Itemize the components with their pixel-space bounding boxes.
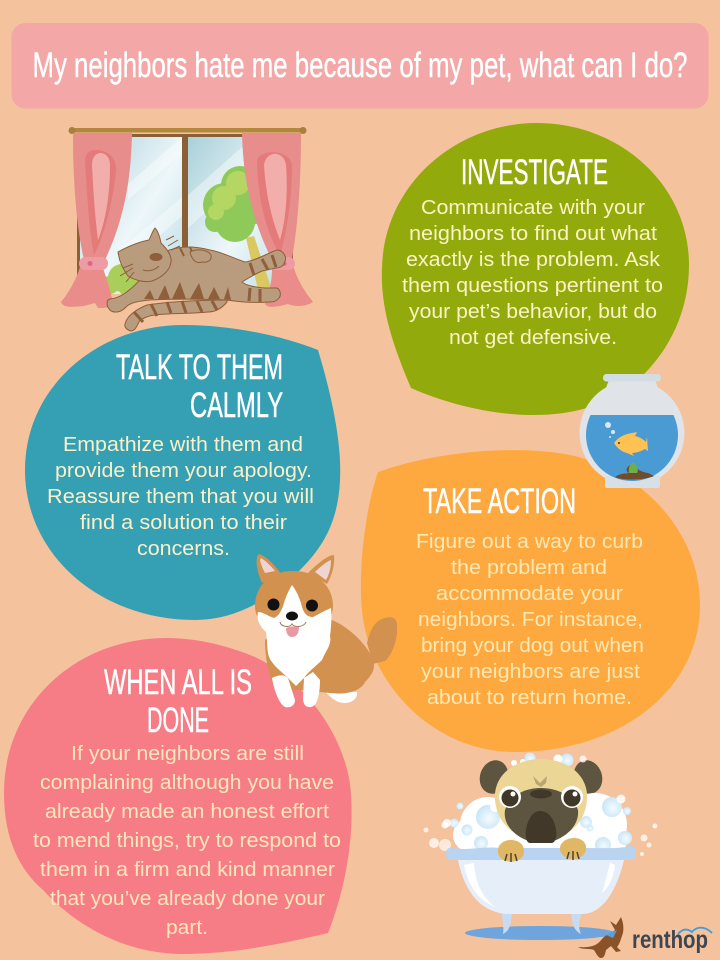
- left curtain: [61, 133, 132, 308]
- take action body: neighbors. For instance,: [418, 609, 643, 631]
- when all is done body: [33, 743, 341, 939]
- icon: goldfish bowl: [580, 374, 684, 488]
- tail: [125, 300, 227, 331]
- head: [118, 228, 171, 282]
- take action heading: TAKE ACTION: [423, 482, 576, 521]
- paws: [498, 838, 586, 862]
- take action body: bring your dog out when: [421, 635, 644, 657]
- ears: [257, 554, 281, 583]
- arm: [190, 250, 211, 263]
- investigate body: them questions pertinent to: [402, 275, 663, 297]
- tail: [367, 617, 397, 664]
- muzzle: [505, 788, 578, 843]
- investigate heading: INVESTIGATE: [461, 153, 608, 192]
- when all is done body: If your neighbors are still: [71, 743, 304, 765]
- investigate body: neighbors to find out what: [409, 223, 657, 245]
- take action body: [416, 531, 644, 709]
- take action body: about to return home.: [427, 687, 632, 709]
- tub rim: [446, 846, 636, 860]
- wordmark arc: [678, 928, 712, 934]
- eyes and nose: [268, 598, 280, 610]
- take action body: accommodate your: [436, 583, 623, 605]
- talk body: [47, 434, 314, 560]
- mouth and tongue: [280, 622, 306, 626]
- talk body: concerns.: [137, 538, 230, 560]
- head: [255, 571, 333, 628]
- panel: talk to them calmly: [25, 325, 340, 620]
- green blob: [382, 123, 689, 415]
- title banner: [12, 23, 708, 108]
- talk heading: CALMLY: [190, 386, 283, 425]
- icon: window with cat: [61, 127, 313, 331]
- ears: [475, 757, 513, 797]
- fish: [614, 432, 648, 456]
- body: [265, 618, 374, 694]
- logo: renthop: [578, 917, 712, 958]
- brow mark: [533, 776, 547, 787]
- talk body: provide them your apology.: [55, 460, 312, 482]
- when all is done heading: WHEN ALL IS: [104, 663, 252, 702]
- curtain rod: [68, 127, 306, 134]
- foam: [424, 752, 658, 860]
- tub feet: [501, 912, 582, 934]
- investigate body: Communicate with your: [421, 197, 645, 219]
- when all is done body: already made an honest effort: [45, 801, 329, 823]
- when all is done body: complaining although you have: [40, 772, 334, 794]
- head: [495, 759, 587, 840]
- coral blob: [4, 638, 352, 954]
- panel: investigate: [382, 123, 689, 415]
- teal blob: [25, 325, 340, 620]
- white face and chest: [257, 585, 331, 686]
- right curtain: [242, 133, 313, 307]
- eyes: [499, 786, 521, 808]
- when all is done heading: [104, 663, 252, 740]
- back foot: [323, 690, 357, 703]
- investigate body: your pet’s behavior, but do: [409, 301, 657, 323]
- talk body: Empathize with them and: [63, 434, 303, 456]
- investigate body: [402, 197, 663, 349]
- soil and plant: [615, 464, 654, 480]
- when all is done body: that you’ve already done your: [50, 888, 325, 910]
- cat: [107, 228, 286, 331]
- front legs: [272, 675, 295, 707]
- body stripes: [144, 282, 231, 300]
- window: [77, 134, 293, 299]
- icon: pug in bathtub: [424, 752, 658, 940]
- panel: when all is done: [4, 638, 352, 954]
- talk heading: [116, 348, 283, 425]
- when all is done heading: DONE: [147, 701, 209, 740]
- kangaroo: [578, 917, 623, 958]
- take action body: Figure out a way to curb: [416, 531, 643, 553]
- when all is done body: them in a firm and kind manner: [40, 859, 335, 881]
- talk body: Reassure them that you will: [47, 486, 314, 508]
- body: [107, 247, 286, 312]
- take action body: the problem and: [451, 557, 607, 579]
- talk body: find a solution to their: [80, 512, 287, 534]
- take action body: your neighbors are just: [421, 661, 640, 683]
- water: [586, 415, 678, 481]
- bubbles: [605, 422, 611, 428]
- when all is done body: part.: [166, 917, 208, 939]
- when all is done body: to mend things, try to respond to: [33, 830, 341, 852]
- orange blob: [361, 450, 700, 752]
- panel: take action: [361, 450, 700, 752]
- tub shadow: [465, 926, 615, 940]
- icon: corgi: [255, 554, 397, 707]
- investigate body: not get defensive.: [449, 327, 617, 349]
- investigate body: exactly is the problem. Ask: [406, 249, 661, 271]
- talk heading: TALK TO THEM: [116, 348, 283, 387]
- tub: [458, 860, 624, 914]
